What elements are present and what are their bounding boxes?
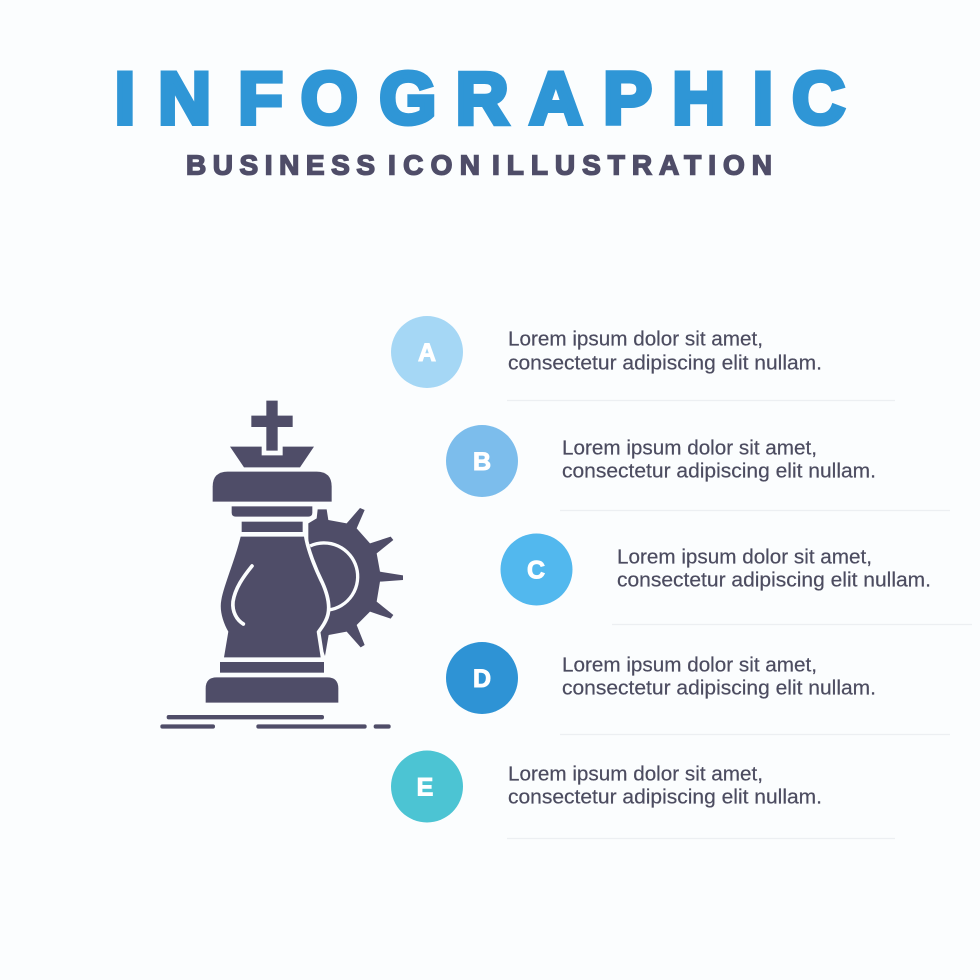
text D: Lorem ipsum dolor sit amet, xyxy=(562,654,817,676)
text B xyxy=(562,438,876,482)
text C xyxy=(617,546,931,592)
badge C xyxy=(500,534,572,606)
text C: consectetur adipiscing elit nullam. xyxy=(617,570,931,592)
text A xyxy=(508,328,822,374)
text E: Lorem ipsum dolor sit amet, xyxy=(508,764,763,786)
step C xyxy=(500,534,931,606)
badge B xyxy=(446,425,518,497)
icon part: body highlight xyxy=(233,566,252,624)
text A: Lorem ipsum dolor sit amet, xyxy=(508,328,763,350)
badge E: E xyxy=(417,774,433,802)
icon part: neck upper xyxy=(232,506,312,517)
step E xyxy=(391,750,822,822)
badge A xyxy=(391,316,463,388)
icon part: gear xyxy=(308,508,403,656)
icon part: crown xyxy=(230,447,314,467)
icon part: base xyxy=(206,677,338,703)
text D xyxy=(562,654,876,700)
text E xyxy=(508,764,822,808)
badge E xyxy=(391,750,463,822)
subtitle: BUSINESS xyxy=(186,150,375,180)
icon: chess king with gear xyxy=(160,401,403,729)
subtitle: ILLUSTRATION xyxy=(492,150,772,180)
icon part: gear inner arc xyxy=(310,543,358,610)
icon part: neck backing xyxy=(239,519,305,535)
subtitle: ICON xyxy=(388,150,480,180)
badge D xyxy=(446,642,518,714)
text B: consectetur adipiscing elit nullam. xyxy=(562,460,876,482)
text D: consectetur adipiscing elit nullam. xyxy=(562,678,876,700)
text E: consectetur adipiscing elit nullam. xyxy=(508,786,822,808)
icon part: neck ring xyxy=(242,522,303,532)
text A: consectetur adipiscing elit nullam. xyxy=(508,352,822,374)
step A xyxy=(391,316,822,388)
badge A: A xyxy=(418,339,436,367)
badge D: D xyxy=(473,665,491,693)
icon part: base ring xyxy=(220,662,324,673)
icon part: body gap xyxy=(304,537,327,657)
title: INFOGRAPHIC xyxy=(115,58,845,140)
step B xyxy=(446,425,876,497)
icon part: king body xyxy=(221,537,327,657)
icon part: collar xyxy=(213,472,332,502)
icon part: ground lines xyxy=(160,715,391,729)
badge C: C xyxy=(527,556,545,584)
badge B: B xyxy=(473,448,491,476)
text B: Lorem ipsum dolor sit amet, xyxy=(562,438,817,460)
step D xyxy=(446,642,876,714)
text C: Lorem ipsum dolor sit amet, xyxy=(617,546,872,568)
icon part: cross xyxy=(251,401,293,451)
